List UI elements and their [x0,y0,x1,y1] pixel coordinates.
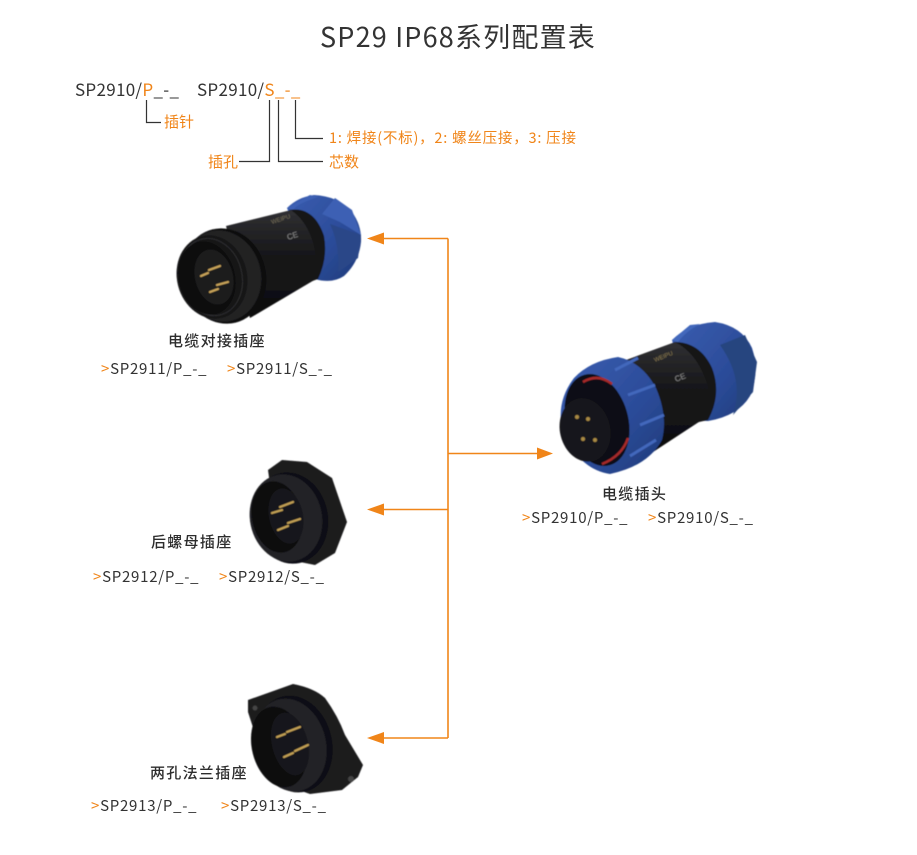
body [626,342,710,454]
part numbers: mating socket: >SP2911/P_-_ [101,358,207,379]
icon: rear nut socket connector [242,460,347,571]
part numbers: flange socket: >SP2913/P_-_ [91,795,197,816]
caption: flange socket: 两孔法兰插座 [150,762,248,783]
flange [248,684,363,794]
threaded barrel [168,228,256,326]
caption: mating socket: 电缆对接插座 [168,330,266,351]
part numbers: rear nut socket: SP2912/S_-_ [228,566,325,587]
face [245,477,309,557]
product marking: WEIPU [654,351,674,364]
caption: rear nut socket: 后螺母插座 [151,531,233,552]
label: socket: 插孔 [208,151,238,172]
recess with red wires [554,366,640,474]
arrowhead: to cable plug [537,448,553,460]
pins [277,727,308,757]
part numbers: mating socket: SP2911/S_-_ [236,358,333,379]
label: core count: 芯数 [329,151,359,172]
part numbers: cable plug: > [648,507,657,528]
nut ribs [615,358,664,456]
face [171,235,243,321]
face [243,701,315,793]
CE mark: CE [673,371,687,384]
ribbed collar [674,342,716,424]
label: pin: 插针 [164,111,194,132]
connection arrows [367,232,553,744]
insert face [553,393,617,467]
icon: cable plug connector [553,322,757,474]
part number key [75,76,577,172]
blue nut [287,195,361,281]
pins [201,266,228,292]
part numbers: flange socket: > [221,795,230,816]
caption: cable plug: 电缆插头 [602,483,667,504]
part numbers: cable plug: >SP2910/P_-_ [522,507,628,528]
icon: cable mating socket connector [168,195,361,333]
part numbers: flange socket: SP2913/S_-_ [230,795,327,816]
part numbers: mating socket: > [227,358,236,379]
part number: plug: SP2910/P_-_ [75,76,179,101]
part number: socket: SP2910/S_-_ [197,76,301,101]
part numbers: rear nut socket: > [219,566,228,587]
label: termination options: 1: 焊接(不标)，2: 螺丝压接，3: 压接 [329,127,577,148]
product marking: WEIPU [271,214,291,226]
threaded barrel [245,687,343,801]
front blue coupling nut [561,357,664,474]
contacts [575,415,597,442]
rear blue nut [672,322,756,421]
title: SP29 IP68系列配置表 [320,16,596,55]
part numbers: cable plug: SP2910/S_-_ [657,507,754,528]
body [226,210,317,318]
arrowhead: to mating socket [367,232,384,244]
threaded barrel [243,465,337,571]
key leader lines [146,100,323,162]
pins [272,502,300,530]
arrowhead: to flange socket [367,732,384,744]
CE mark: CE [286,230,299,242]
hex nut [268,460,347,565]
dark collar [289,210,325,284]
arrowhead: to rear nut socket [367,504,384,516]
front flange [172,219,276,333]
part numbers: rear nut socket: >SP2912/P_-_ [93,566,199,587]
icon: two-hole flange socket connector [243,684,363,801]
